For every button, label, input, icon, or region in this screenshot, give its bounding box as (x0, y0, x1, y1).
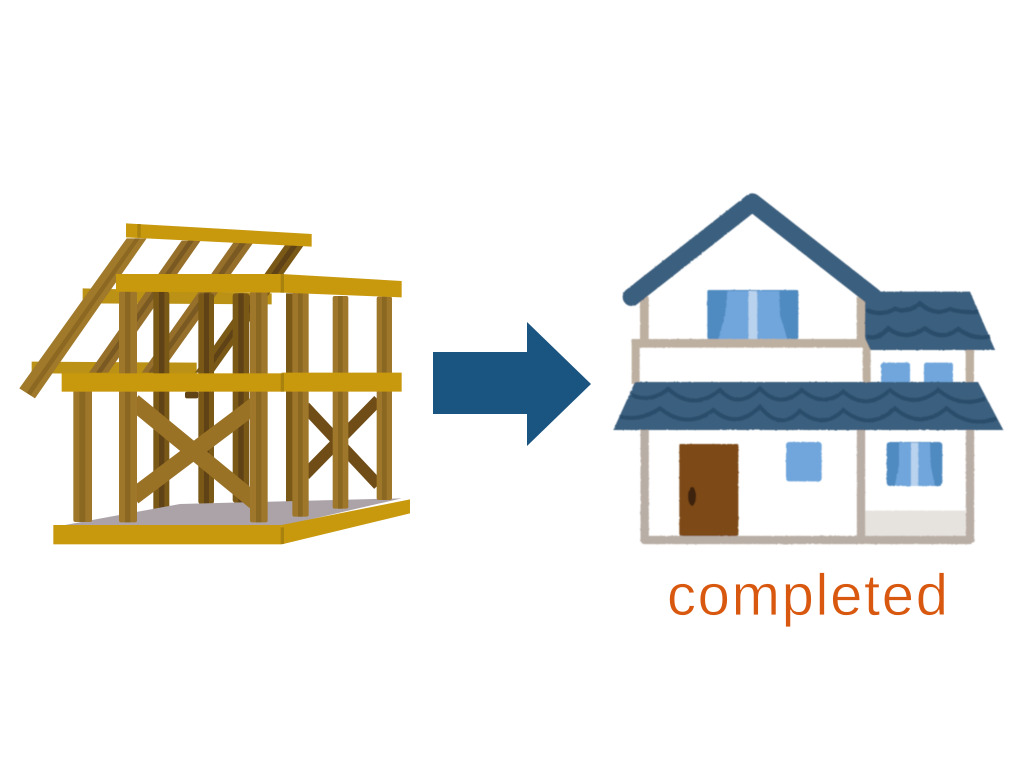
door (679, 444, 738, 536)
lower storey (613, 382, 1003, 540)
arrow (433, 322, 591, 446)
lower square window (786, 442, 822, 481)
small upper windows (881, 363, 953, 383)
icon: completed house (613, 202, 1003, 540)
right wall braces (305, 400, 378, 485)
back roof rafters (89, 241, 303, 373)
left rafter (19, 238, 147, 398)
lower curtained window (887, 442, 942, 486)
front posts (73, 292, 392, 522)
side roof (865, 292, 995, 350)
floor sill (53, 499, 410, 544)
upper curtained window (707, 290, 798, 339)
caption: completed: completed (667, 563, 948, 628)
lower roof waves (620, 388, 997, 422)
left wall cross braces (133, 402, 255, 502)
upper walls (632, 297, 974, 384)
gable roof (632, 202, 873, 297)
upper storey (632, 202, 995, 384)
front beams (62, 274, 402, 392)
lower roof (613, 382, 1003, 430)
back beams (32, 288, 272, 374)
icon: house frame under construction (19, 223, 410, 544)
concrete floor (65, 498, 402, 526)
lower walls (645, 428, 970, 540)
back posts (153, 292, 293, 513)
top roof beam (126, 223, 312, 247)
